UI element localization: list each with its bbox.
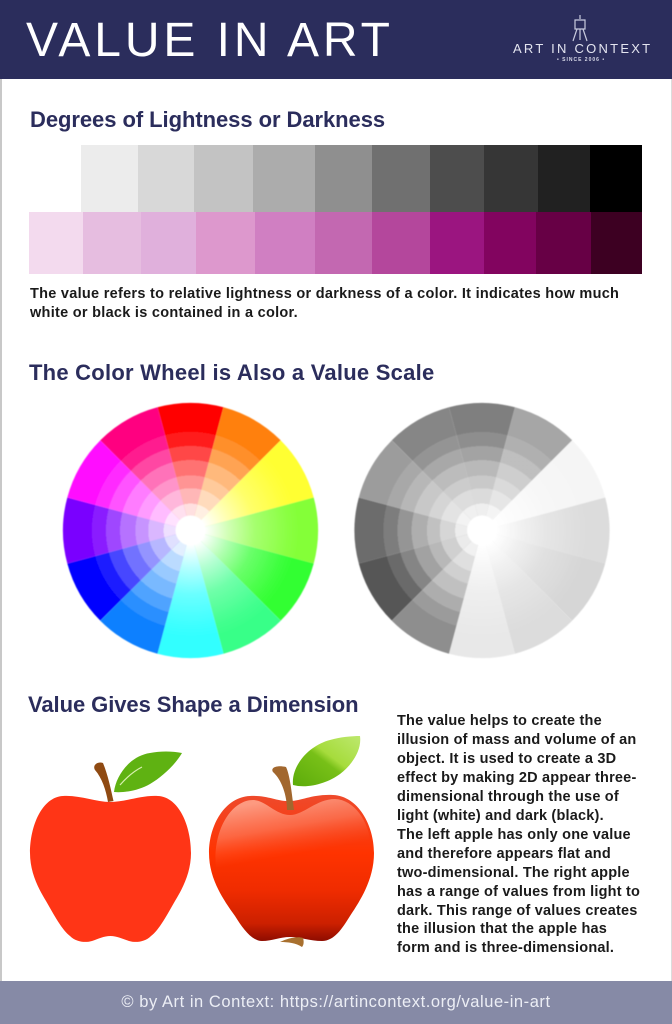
apple body xyxy=(30,796,191,942)
page edge left xyxy=(0,79,2,981)
text: value creates form xyxy=(397,713,640,956)
text: value definition xyxy=(30,286,619,321)
icon: easel xyxy=(572,15,588,42)
magenta scale row xyxy=(29,212,642,274)
text: value creates form: has a range of values from light to xyxy=(397,884,640,900)
text: value definition: The value refers to relative lightness or darkness of a color. It indicates how much xyxy=(30,286,619,302)
footer band xyxy=(0,981,672,1024)
title: VALUE IN ART xyxy=(26,14,394,67)
grey scale row xyxy=(81,145,642,212)
text: value creates form: object. It is used to create a 3D xyxy=(397,751,616,767)
text: value creates form: and therefore appears flat and xyxy=(397,846,611,862)
shaded apple xyxy=(209,736,374,947)
bottom stem xyxy=(280,937,304,947)
logo tagline: • SINCE 2006 • xyxy=(557,57,605,63)
text: value creates form: The left apple has only one value xyxy=(397,827,631,843)
text: value creates form: dimensional through the use of xyxy=(397,789,619,805)
value scale strips xyxy=(29,145,642,274)
text: value creates form: The value helps to create the xyxy=(397,713,602,729)
apples illustration xyxy=(30,736,374,947)
heading: color wheel: The Color Wheel is Also a Value Scale xyxy=(29,360,434,385)
text: value creates form: dark. This range of values creates xyxy=(397,903,638,919)
header band xyxy=(0,0,672,79)
apple highlight xyxy=(215,799,370,868)
page edge right xyxy=(671,79,672,981)
text: value creates form: form and is three-dimensional. xyxy=(397,940,614,956)
text: value creates form: light (white) and dark (black). xyxy=(397,808,604,824)
text: value creates form: the illusion that the apple has xyxy=(397,921,607,937)
text: value creates form: two-dimensional. The right apple xyxy=(397,865,630,881)
flat apple xyxy=(30,752,191,942)
logo wordmark: ART IN CONTEXT xyxy=(513,41,652,56)
apple leaf xyxy=(114,752,182,792)
grayscale wheel xyxy=(354,403,610,658)
text: value creates form: effect by making 2D appear three- xyxy=(397,770,636,786)
apple leaf xyxy=(293,736,360,786)
logo: art in context xyxy=(513,15,652,63)
apple stem xyxy=(272,766,294,810)
footer band: © by Art in Context: https://artincontext.org/value-in-art xyxy=(121,993,551,1011)
apple stem xyxy=(94,762,114,802)
color wheel: hues xyxy=(63,403,318,658)
color wheels xyxy=(62,402,610,659)
text: value definition: white or black is contained in a color. xyxy=(30,305,298,321)
heading: value gives shape: Value Gives Shape a Dimension xyxy=(28,692,359,717)
text: value creates form: illusion of mass and volume of an xyxy=(397,732,636,748)
apple body xyxy=(209,795,374,941)
heading: degrees of lightness: Degrees of Lightness or Darkness xyxy=(30,107,385,132)
